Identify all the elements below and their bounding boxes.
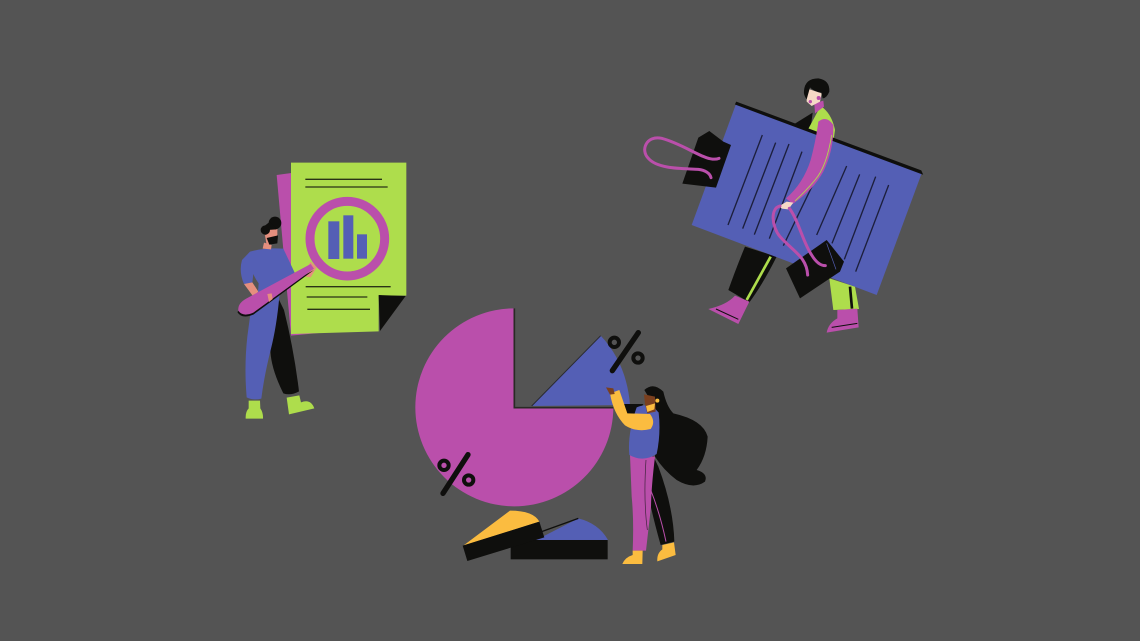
long black hair [644,386,708,485]
percent icon top [610,333,643,371]
yellow arm [610,390,653,430]
blue slice [532,336,630,406]
back page [277,173,333,336]
trouser seams [645,460,647,530]
blue shirt and trousers [241,248,295,399]
magnifier handle shadow [237,270,314,316]
hand [606,387,615,395]
black leg [647,455,674,545]
green shoes [246,395,314,419]
black leg [270,295,299,394]
bar chart in magnifier [328,215,367,259]
pink trousers [630,455,655,551]
document top edge [736,103,922,173]
magnifier handle [238,264,314,315]
magnifier ring shadow [350,257,377,273]
shoe soles [716,309,857,327]
base blue slice [511,518,608,559]
blue document [692,104,922,295]
text lines on report [305,179,391,309]
skin: neck, arm and hand [244,243,317,297]
pink arm [786,119,833,204]
figure: woman with pie chart [415,308,708,564]
magnifier ring [310,201,385,276]
yellow shoes [622,542,676,564]
left binder clip [645,131,731,188]
neck and face [804,78,829,113]
green report page [291,163,406,334]
face [644,394,659,413]
figure: person carrying clipped document [645,78,922,333]
head and hair [261,217,281,245]
finger on handle [267,293,273,302]
document lines [728,135,889,272]
black trousers [728,247,777,302]
figure: man inspecting report with magnifier [237,163,406,419]
hand [779,202,793,209]
slice shadow [532,336,601,406]
page fold [379,295,406,331]
arm stripe [795,135,832,201]
green torso [807,106,835,142]
base yellow slice [463,511,544,561]
pink shoes [708,296,859,333]
black torso [794,113,813,133]
trouser stripe [747,257,771,300]
lower binder clip [773,206,844,298]
percent icon bottom [439,455,473,493]
black slice base [613,404,643,415]
pink pie chart [415,308,613,506]
pie inner edge [514,308,613,408]
green trouser leg [829,278,859,310]
blue top [629,405,659,459]
